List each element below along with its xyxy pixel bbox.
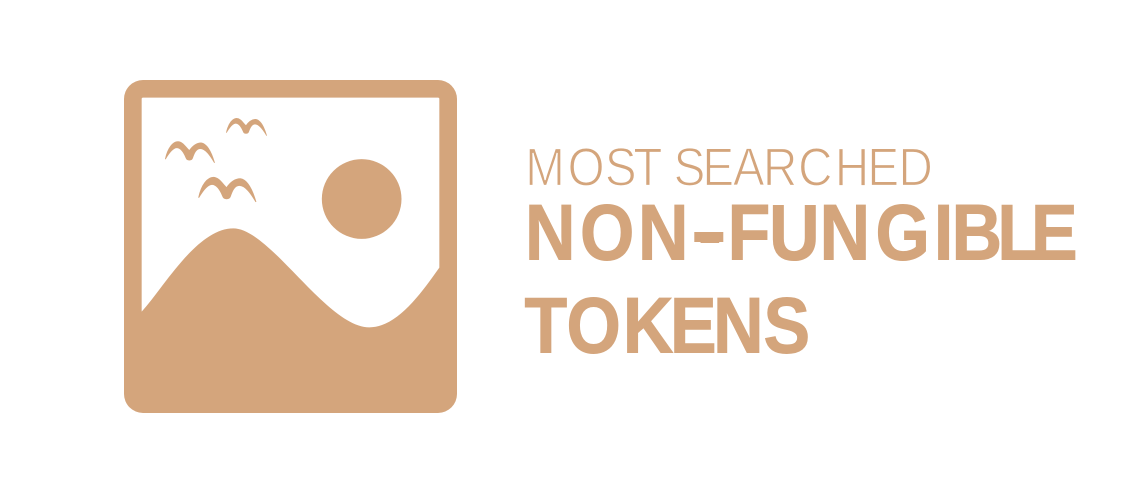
title [524, 137, 1078, 369]
title line: most searched: MOST SEARCHED [525, 137, 933, 197]
icon: lower bird [199, 177, 256, 202]
icon: left bird [165, 142, 215, 163]
icon: landscape picture [124, 80, 457, 413]
icon: sun [322, 159, 401, 239]
sky area above the hill [142, 98, 439, 327]
icon frame [124, 80, 457, 413]
icon: top bird [226, 118, 267, 136]
title line: tokens: TOKENS [524, 282, 810, 369]
title line: non-fungible: NON-FUNGIBLE [525, 188, 1078, 277]
